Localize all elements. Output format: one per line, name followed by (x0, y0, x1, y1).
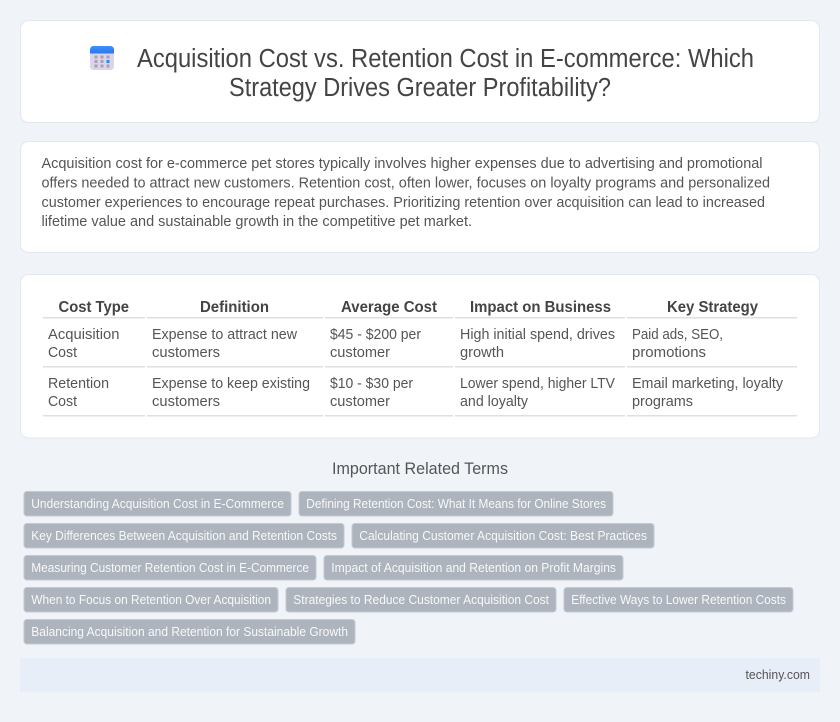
table header: Impact on Business (470, 299, 611, 316)
header panel (20, 20, 820, 122)
related term tags: Defining Retention Cost: What It Means for Online Stores (306, 497, 606, 511)
table row: retention cost: Expense to keep existing (152, 375, 310, 392)
table row: retention cost: Cost (48, 393, 78, 410)
table row: retention cost: customer (330, 393, 390, 410)
table row: acquisition cost: customers (152, 344, 220, 361)
table row: retention cost (48, 375, 783, 410)
table row: retention cost: Lower spend, higher LTV (460, 375, 615, 392)
table row: retention cost: Email marketing, loyalty (632, 375, 783, 392)
table row: retention cost: $10 - $30 per (330, 375, 413, 392)
related term tags: Understanding Acquisition Cost in E-Commerce (31, 497, 284, 511)
table row: acquisition cost: Paid ads, SEO, (632, 326, 723, 343)
footer source text: techiny.com (746, 667, 810, 682)
related term tags: When to Focus on Retention Over Acquisition (31, 593, 271, 607)
table header (58, 299, 758, 316)
table row: acquisition cost: Expense to attract new (152, 326, 297, 343)
table row: acquisition cost: customer (330, 344, 390, 361)
related term tags (24, 492, 793, 644)
table row: acquisition cost: Acquisition (48, 326, 120, 343)
table row: acquisition cost: $45 - $200 per (330, 326, 421, 343)
related term tags: Measuring Customer Retention Cost in E-Commerce (31, 561, 309, 575)
table row: acquisition cost: Cost (48, 344, 78, 361)
related term tags: Balancing Acquisition and Retention for Sustainable Growth (31, 625, 348, 639)
related term tags: Effective Ways to Lower Retention Costs (571, 593, 786, 607)
intro paragraph (42, 155, 770, 230)
heading: important related terms: Important Related Terms (332, 460, 508, 478)
footer band (20, 658, 820, 692)
title (137, 45, 754, 102)
table row: acquisition cost (48, 326, 723, 361)
table row: retention cost: programs (632, 393, 693, 410)
table row: retention cost: customers (152, 393, 220, 410)
table header: Average Cost (341, 299, 438, 316)
table header: Definition (200, 299, 269, 316)
table header: Key Strategy (667, 299, 758, 316)
icon: calendar (90, 46, 114, 70)
intro paragraph: customer experiences to encourage repeat purchases. Prioritizing retention over acquisition can lead to increased (42, 194, 765, 211)
table row: acquisition cost: High initial spend, drives (460, 326, 615, 343)
panel: introduction (20, 142, 820, 252)
title: Strategy Drives Greater Profitability? (229, 74, 611, 102)
table row: acquisition cost: promotions (632, 344, 706, 361)
table header: Cost Type (58, 299, 129, 316)
intro paragraph: Acquisition cost for e-commerce pet stores typically involves higher expenses due to advertising and promotional (42, 155, 762, 172)
title: Acquisition Cost vs. Retention Cost in E-commerce: Which (137, 45, 754, 73)
related term tags: Calculating Customer Acquisition Cost: Best Practices (359, 529, 647, 543)
related term tags: Impact of Acquisition and Retention on Profit Margins (331, 561, 616, 575)
related term tags: Strategies to Reduce Customer Acquisition Cost (293, 593, 549, 607)
intro paragraph: lifetime value and sustainable growth in the competitive pet market. (42, 213, 472, 230)
table row: retention cost: and loyalty (460, 393, 528, 410)
table row: retention cost: Retention (48, 375, 109, 392)
intro paragraph: offers needed to attract new customers. Retention cost, often lower, focuses on loyalty programs and personalized (42, 174, 770, 192)
panel: cost comparison table (20, 274, 820, 438)
table row: acquisition cost: growth (460, 344, 504, 361)
related term tags: Key Differences Between Acquisition and Retention Costs (31, 529, 337, 543)
